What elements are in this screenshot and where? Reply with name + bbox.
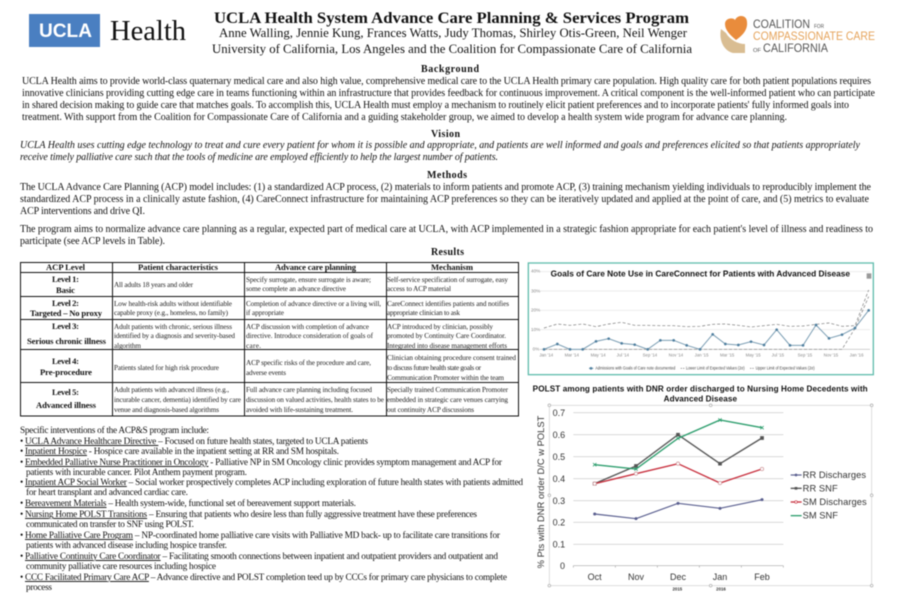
chart: Goals of Care note use line chart: 40% — [531, 269, 540, 274]
table row: Level 1: Specify surrogate, ensure surrogate is aware; — [246, 276, 371, 284]
text block: specific interventions list: • — [20, 478, 23, 488]
text block: specific interventions list: patients with incurable cancer. Pilot Anthem payment program. — [26, 468, 247, 478]
text block: specific interventions list: • — [20, 531, 23, 541]
table header row: Patient characteristics — [138, 262, 219, 272]
text block: specific interventions list: CCC Facilitated Primary Care ACP – Advance directive and POLST completion teed up by CCCs for primary care physicians to complete — [25, 572, 507, 583]
text block: vision: UCLA Health uses cutting edge technology to treat and cure every patient for whom it is possible and appropriate, and patients are well informed and goals and preferences elicited so that patients appropriately — [20, 140, 861, 151]
x axis labels: Jan '16 — [850, 352, 864, 357]
table row: Level 5: Level 5: — [52, 387, 79, 397]
table: ACP levels — [20, 262, 519, 416]
line: SM Discharges — [593, 462, 764, 485]
x axis labels: Sep '15 — [798, 352, 813, 357]
text block: specific interventions list: process — [26, 583, 52, 593]
table row: Level 4: Patients slated for high risk procedure — [114, 364, 219, 372]
chart: Goals of Care note use line chart: 0% — [533, 347, 539, 352]
x axis labels: Jul '14 — [617, 352, 630, 357]
chart title: Goals of Care Note Use in CareConnect for Patients with Advanced Disease — [551, 269, 850, 279]
chart legend: SM SNF — [803, 511, 838, 521]
logo: Coalition for Compassionate Care of California: COALITION — [753, 17, 810, 31]
table row: Level 3: Adult patients with chronic, serious illness — [114, 323, 232, 331]
x axis labels: Nov — [628, 572, 644, 582]
table row: Level 3 — [27, 321, 507, 350]
table row: Level 1: some complete an advance directive — [246, 285, 346, 293]
table row: Level 3: identified by a diagnosis and severity-based — [114, 332, 235, 340]
chart: Goals of Care note use line chart: 30% — [531, 288, 540, 293]
table row: Level 4: Clinician obtaining procedure consent trained — [387, 354, 516, 362]
logo: Coalition for Compassionate Care of California: OF — [753, 48, 762, 54]
table row: Level 5: Full advance care planning including focused — [246, 386, 372, 394]
text block: background: UCLA Health aims to provide world-class quaternary medical care and also high value, comprehensive medical care to the UCLA Health primary care population. High quality care for both patient populations requires — [22, 76, 871, 87]
x axis labels: Mar '15 — [720, 352, 735, 357]
table row: Level 1: access to ACP material — [387, 285, 451, 293]
table row: Level 4: Pre-procedure — [40, 367, 92, 377]
table row: Level 5: out continuity ACP discussions — [387, 406, 474, 414]
x axis labels: Jan '14 — [539, 352, 554, 357]
x axis labels — [588, 572, 770, 592]
table row: Level 2: Completion of advance directive or a living will, — [246, 300, 381, 308]
chart: Goals of Care note use line chart — [528, 263, 873, 375]
chart: Goals of Care note use line chart: 10% — [531, 327, 540, 332]
table row: Level 3: algorithm — [114, 342, 141, 350]
table row: Level 1: All adults 18 years and older — [114, 281, 194, 289]
text block: specific interventions list: Palliative Continuity Care Coordinator – Facilitating smooth connections between inpatient and outpatient providers and outpatient and — [25, 552, 498, 562]
logo: UCLA Health: Health — [110, 16, 186, 47]
header: title and authors — [212, 10, 692, 56]
table row: Level 3: Integrated into disease management efforts — [387, 342, 507, 350]
line: RR Discharges — [595, 500, 762, 519]
table row: Level 5: venue and diagnosis-based algorithms — [114, 406, 219, 414]
x axis labels: Jan — [713, 572, 727, 582]
table row: Level 5: Specially trained Communication Promoter — [387, 386, 509, 394]
table row: Level 4: ACP specific risks of the procedure and care, — [246, 359, 371, 367]
y axis labels: 0.5 — [553, 452, 565, 462]
x axis labels: Mar '14 — [565, 352, 580, 357]
y axis labels: 0.6 — [553, 430, 565, 440]
x axis labels: Dec — [670, 572, 686, 582]
text block: specific interventions list: for heart transplant and advanced cardiac care. — [26, 487, 188, 498]
text block: specific interventions list: Nursing Home POLST Transitions – Ensuring that patients who desire less than fully aggressive treatment have these preferences — [25, 509, 477, 520]
text block: vision: receive timely palliative care such that the tools of medicine are employed efficiently to help the largest number of patients. — [20, 152, 498, 163]
text block: methods: standardized ACP process in a clinically astute fashion, (4) CareConnect infrastructure for maintaining ACP preferences so they can be iteratively updated and applied at the point of care, and (5) metrics to evaluate — [20, 194, 870, 205]
y axis labels — [553, 408, 565, 571]
text block: specific interventions list: • — [20, 458, 23, 468]
table header row — [46, 262, 474, 272]
text block: specific interventions list: Embedded Palliative Nurse Practitioner in Oncology - Palliative NP in SM Oncology clinic provides symptom management and ACP for — [25, 457, 503, 468]
logo: Coalition for Compassionate Care of California: CALIFORNIA — [763, 41, 828, 55]
y axis labels: 0 — [560, 561, 565, 571]
x axis labels: Feb — [754, 572, 770, 582]
y axis labels: 0.1 — [553, 540, 565, 550]
table row: Level 5: embedded in strategic care venues carrying — [387, 396, 508, 404]
header: title and authors: UCLA Health System Advance Care Planning & Services Program — [214, 10, 689, 27]
chart legend: RR SNF — [803, 483, 838, 493]
table row: Level 4: Communication Promoter within the team — [387, 374, 504, 382]
x axis labels: Jul '15 — [772, 352, 785, 357]
text block: vision — [20, 140, 861, 163]
text block: specific interventions list: • — [20, 552, 23, 562]
table row: Level 4: to discuss future health state goals or — [387, 364, 482, 372]
table row: Level 1: Basic — [56, 285, 75, 295]
chart title — [533, 385, 868, 404]
table row: Level 4: Level 4: — [52, 356, 79, 366]
header: title and authors: Anne Walling, Jennie Kung, Frances Watts, Judy Thomas, Shirley Otis-Green, Neil Wenger — [219, 26, 688, 40]
text block: methods: The program aims to normalize advance care planning as a regular, expected part of medical care at UCLA, with ACP implemented in a strategic fashion appropriate for each patient's level of illness and readiness to — [20, 224, 873, 235]
text block: specific interventions list: • — [20, 499, 23, 509]
text block: background: treatment. With support from the Coalition for Compassionate Care of California and a guiding stakeholder group, we aimed to develop a health system wide program for advance care planning. — [22, 112, 787, 123]
logo: Coalition for Compassionate Care of California: COMPASSIONATE CARE — [753, 29, 875, 43]
table row: Level 3: care. — [246, 342, 261, 350]
line: admissions with goals of care note — [544, 310, 869, 349]
text block: specific interventions list: • — [20, 447, 23, 457]
text block: specific interventions list: • — [20, 573, 23, 583]
text block: methods: ACP interventions and drive QI. — [20, 206, 145, 217]
x axis labels: 2015 — [673, 587, 683, 592]
table row: Level 1 — [52, 274, 508, 295]
text block: specific interventions list: community palliative care resources including hospice — [26, 562, 216, 572]
table row: Level 3: ACP discussion with completion of advance — [246, 323, 369, 331]
text block: methods — [20, 182, 873, 247]
table row: Level 2: CareConnect identifies patients and notifies — [387, 300, 509, 308]
line: lower limit — [544, 297, 869, 349]
text block: specific interventions list: patients with advanced disease including hospice transfer. — [26, 540, 227, 551]
chart legend — [791, 470, 867, 521]
table row: Level 5: incurable cancer, dementia) identified by care — [114, 396, 241, 404]
table header row: Mechanism — [431, 262, 474, 272]
table row: Level 2: if appropriate — [246, 309, 284, 317]
line: upper limit — [544, 290, 869, 328]
y axis labels: 0.7 — [553, 408, 565, 418]
text block: methods: participate (see ACP levels in Table). — [20, 236, 165, 247]
table row: Level 5: Adult patients with advanced illness (e.g., — [114, 386, 229, 394]
table row: Level 2: Targeted – No proxy — [30, 308, 103, 318]
table row: Level 2: Level 2: — [52, 298, 79, 308]
text block: specific interventions list: Home Palliative Care Program – NP-coordinated home palliative care visits with Palliative MD back- up to facilitate care transitions for — [25, 530, 501, 541]
text block: specific interventions list: Inpatient Hospice - Hospice care available in the inpatient setting at RR and SM hospitals. — [25, 447, 339, 457]
text block: methods: The UCLA Advance Care Planning (ACP) model includes: (1) a standardized ACP process, (2) materials to inform patients and promote ACP, (3) training mechanism yielding individuals to reproducibly implement the — [20, 182, 872, 193]
chart: Goals of Care note use line chart: 20% — [531, 308, 540, 313]
text block: specific interventions list: Inpatient ACP Social Worker – Social worker prospectively completes ACP including exploration of future health states with patients admitted — [25, 477, 523, 488]
table row: Level 3: ACP introduced by clinician, possibly — [387, 323, 493, 331]
header: title and authors: University of California, Los Angeles and the Coalition for Compassionate Care of California — [212, 42, 692, 56]
table row: Level 2 — [30, 298, 509, 318]
x axis labels: Sep '14 — [643, 352, 658, 357]
chart legend: Admissions with Goals of Care note documented — [595, 366, 676, 371]
text block: specific interventions list: communicated on transfer to SNF using POLST. — [26, 519, 194, 530]
x axis labels: Nov '15 — [824, 352, 839, 357]
line: RR SNF — [595, 435, 762, 484]
table row: Level 3: promoted by Continuity Care Coordinator. — [387, 332, 506, 340]
table row: Level 5: avoided with life-sustaining treatment. — [246, 406, 353, 414]
table row: Level 5: discussion on valued activities, health states to be — [246, 396, 384, 404]
text block: specific interventions list: • — [20, 510, 23, 520]
x axis labels: Nov '14 — [669, 352, 684, 357]
text block: background: in shared decision making to guide care that matches goals. To accomplish this, UCLA Health must employ a mechanism to routinely elicit patient preferences and to incorporate patients' fully informed goals into — [22, 100, 849, 111]
chart title: POLST among patients with DNR order discharged to Nursing Home Decedents with — [533, 385, 868, 394]
table row: Level 3: Level 3: — [52, 321, 79, 331]
logo: UCLA Health: UCLA — [39, 21, 92, 42]
chart: POLST among patients with DNR order line chart — [533, 385, 873, 592]
x axis labels: May '14 — [591, 352, 606, 357]
table row: Level 3: directive. Introduce consideration of goals of — [246, 332, 374, 340]
table row: Level 5: Advanced illness — [36, 400, 97, 410]
text block: background — [22, 76, 876, 123]
y axis labels: 0.4 — [553, 474, 565, 484]
table header row: Advance care planning — [275, 262, 357, 272]
x axis labels: Oct — [588, 572, 602, 582]
x axis labels: Jan '15 — [695, 352, 709, 357]
table row: Level 2: capable proxy (e.g., homeless, no family) — [114, 309, 229, 317]
chart legend: Upper Limit of Expected Values (2σ) — [756, 366, 815, 371]
text block: background: innovative clinicians providing cutting edge care in teams functioning within an infrastructure that provides feedback for continuous improvement. A critical component is the well-informed patient who can participate — [22, 88, 876, 99]
logo: Coalition for Compassionate Care of California — [720, 16, 875, 55]
logo: UCLA Health — [29, 14, 186, 47]
heading: Results: Results — [431, 247, 464, 258]
line: SM SNF — [593, 418, 764, 471]
heading: Vision: Vision — [431, 129, 460, 140]
text block: specific interventions list: UCLA Advance Healthcare Directive – Focused on future health states, targeted to UCLA patients — [25, 436, 368, 447]
table row: Level 2: appropriate clinician to ask — [387, 309, 460, 317]
y axis labels: 0.2 — [553, 518, 565, 528]
heading: Methods: Methods — [427, 170, 467, 181]
chart legend: SM Discharges — [803, 497, 867, 507]
y axis title: % Pts with DNR order D/C w POLST — [536, 415, 546, 568]
text block: specific interventions list: • — [20, 437, 23, 447]
menu icon — [867, 273, 871, 279]
table row: Level 1: Level 1: — [52, 274, 79, 284]
selection frame — [548, 404, 873, 587]
logo: Coalition for Compassionate Care of California: FOR — [814, 24, 824, 30]
chart title: Advanced Disease — [664, 395, 737, 404]
table header row: ACP Level — [46, 262, 86, 272]
chart legend: Lower Limit of Expected Values (2σ) — [686, 366, 745, 371]
x axis labels — [539, 352, 864, 357]
chart legend: RR Discharges — [803, 470, 866, 480]
x axis labels: May '15 — [746, 352, 761, 357]
chart legend — [589, 366, 815, 371]
table row: Level 2: Low health-risk adults without identifiable — [114, 300, 232, 308]
table row: Level 1: Self-service specification of surrogate, easy — [387, 276, 508, 284]
text block: specific interventions list: Bereavement Materials – Health system-wide, functional set of bereavement support materials. — [25, 498, 356, 509]
x axis labels: 2016 — [716, 587, 726, 592]
text block: specific interventions list: Specific interventions of the ACP&S program include: — [20, 425, 209, 436]
heading: Background: Background — [421, 64, 479, 75]
table row: Level 5 — [36, 386, 509, 414]
table row: Level 4 — [40, 354, 516, 382]
table row: Level 3: Serious chronic illness — [27, 336, 107, 346]
text block: specific interventions list — [20, 425, 523, 593]
y axis labels: 0.3 — [553, 496, 565, 506]
table row: Level 4: adverse events — [246, 369, 286, 377]
